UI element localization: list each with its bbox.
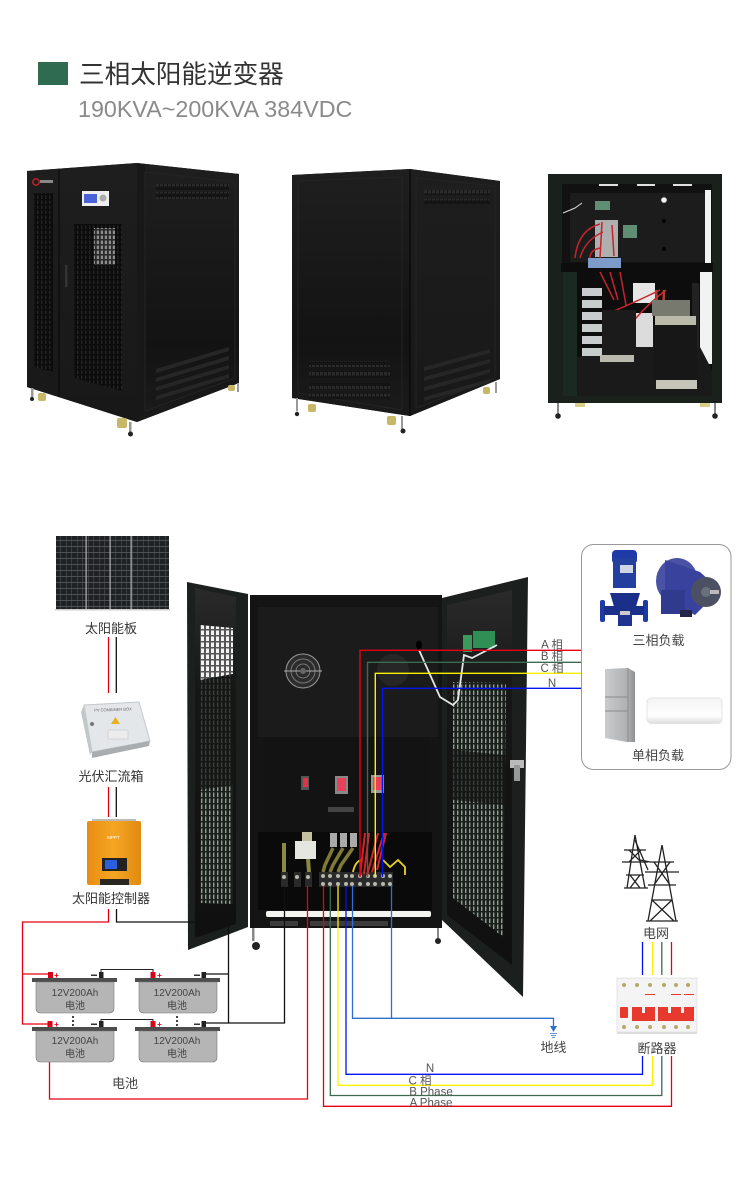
icon: refrigerator <box>605 668 635 742</box>
header title block <box>38 60 352 122</box>
tower 1 <box>622 835 648 888</box>
battery 3: + <box>54 1020 59 1029</box>
right door <box>442 577 528 997</box>
label: ground wire: 地线 <box>540 1040 567 1055</box>
switches <box>301 775 384 812</box>
phase labels at grid side: C 相 <box>408 1074 432 1088</box>
terminal block <box>281 832 405 887</box>
phase labels at load side <box>540 638 564 690</box>
icon: circuit breaker <box>617 978 697 1034</box>
control board <box>463 631 495 652</box>
label: breaker: 断路器 <box>637 1041 677 1056</box>
battery 4 <box>135 1020 220 1062</box>
capacitors <box>582 288 602 356</box>
label: solar panel: 太阳能板 <box>85 621 137 636</box>
B phase input <box>330 886 662 1096</box>
battery 4: 电池 <box>167 1047 187 1060</box>
N input <box>346 886 642 1074</box>
icon: solar controller: MPPT <box>107 835 120 840</box>
wiring: panel to combiner <box>108 637 116 693</box>
C phase line <box>375 673 581 877</box>
icon: motor <box>656 558 721 617</box>
cabinet body <box>250 595 442 950</box>
icon: PV combiner box <box>81 702 150 758</box>
left door <box>187 582 248 950</box>
negative wires <box>116 886 284 1023</box>
label: power grid: 电网 <box>643 926 669 941</box>
battery bank <box>32 971 220 1062</box>
icon: solar controller <box>87 819 141 885</box>
label: single phase load: 单相负载 <box>632 748 684 763</box>
product photo: inverter front view <box>27 163 239 436</box>
icon: green title square <box>38 62 68 85</box>
phase labels at grid side: B Phase <box>409 1086 453 1098</box>
battery 2 <box>135 971 220 1013</box>
transformers <box>600 300 697 389</box>
cable <box>419 645 497 705</box>
icon: transmission towers <box>622 835 679 921</box>
phase labels at grid side: A Phase <box>410 1098 452 1110</box>
battery 4: + <box>157 1020 162 1029</box>
tower 2 <box>635 840 679 921</box>
icon: PV combiner box: PV COMBINER BOX <box>94 706 132 713</box>
ellipsis dots <box>72 1016 178 1026</box>
icon: pump <box>600 550 648 626</box>
battery 1: + <box>54 971 59 980</box>
wiring: combiner to controller <box>108 787 116 817</box>
A phase input <box>324 886 672 1106</box>
phase labels at load side: B 相 <box>541 650 563 663</box>
grid to breaker wires <box>642 942 672 975</box>
icon: solar panel <box>55 536 170 610</box>
wiring and contactors <box>563 201 666 350</box>
subtitle: 190KVA~200KVA 384VDC <box>78 96 352 122</box>
brand logo <box>33 179 53 185</box>
phase labels at load side: A 相 <box>541 638 563 652</box>
label: three phase load: 三相负载 <box>632 633 685 648</box>
A phase line <box>360 650 581 877</box>
opened inverter cabinet <box>187 577 528 997</box>
label: battery: 电池 <box>112 1076 138 1091</box>
display panel <box>82 191 109 206</box>
wiring: AC output phases to load <box>360 650 581 877</box>
icon: air conditioner <box>647 698 722 724</box>
phase labels at load side: N <box>548 678 556 690</box>
B phase line <box>368 662 581 877</box>
series links <box>101 970 153 1022</box>
battery 3: 电池 <box>65 1047 85 1060</box>
battery 2: + <box>157 971 162 980</box>
product photo: inverter interior view <box>548 174 722 419</box>
battery 2: 12V200Ah <box>154 988 200 999</box>
label: solar controller: 太阳能控制器 <box>72 891 150 906</box>
C phase input <box>338 886 652 1085</box>
battery 1: 12V200Ah <box>52 988 98 999</box>
battery 3: 12V200Ah <box>52 1036 98 1047</box>
title: 三相太阳能逆变器 <box>79 60 284 89</box>
phase labels at load side: C 相 <box>540 662 564 675</box>
battery 2: 电池 <box>167 999 187 1012</box>
phase labels at grid side: N <box>426 1063 434 1075</box>
icon: ground symbol <box>550 1026 557 1038</box>
product photo: inverter rear view <box>292 169 500 434</box>
N line <box>382 688 581 877</box>
panel: loads <box>582 544 731 770</box>
cooling fan <box>284 654 322 688</box>
positive wires <box>22 886 308 1099</box>
wiring: battery DC circuit <box>22 886 308 1099</box>
battery 4: 12V200Ah <box>154 1036 200 1047</box>
label: combiner box: 光伏汇流箱 <box>78 769 144 784</box>
wiring: grid input via breaker <box>324 886 672 1106</box>
battery 1 <box>32 971 117 1013</box>
phase labels at grid side <box>408 1063 453 1110</box>
ground wires <box>352 886 554 1030</box>
battery 1: 电池 <box>65 999 85 1012</box>
battery 3 <box>32 1020 117 1062</box>
